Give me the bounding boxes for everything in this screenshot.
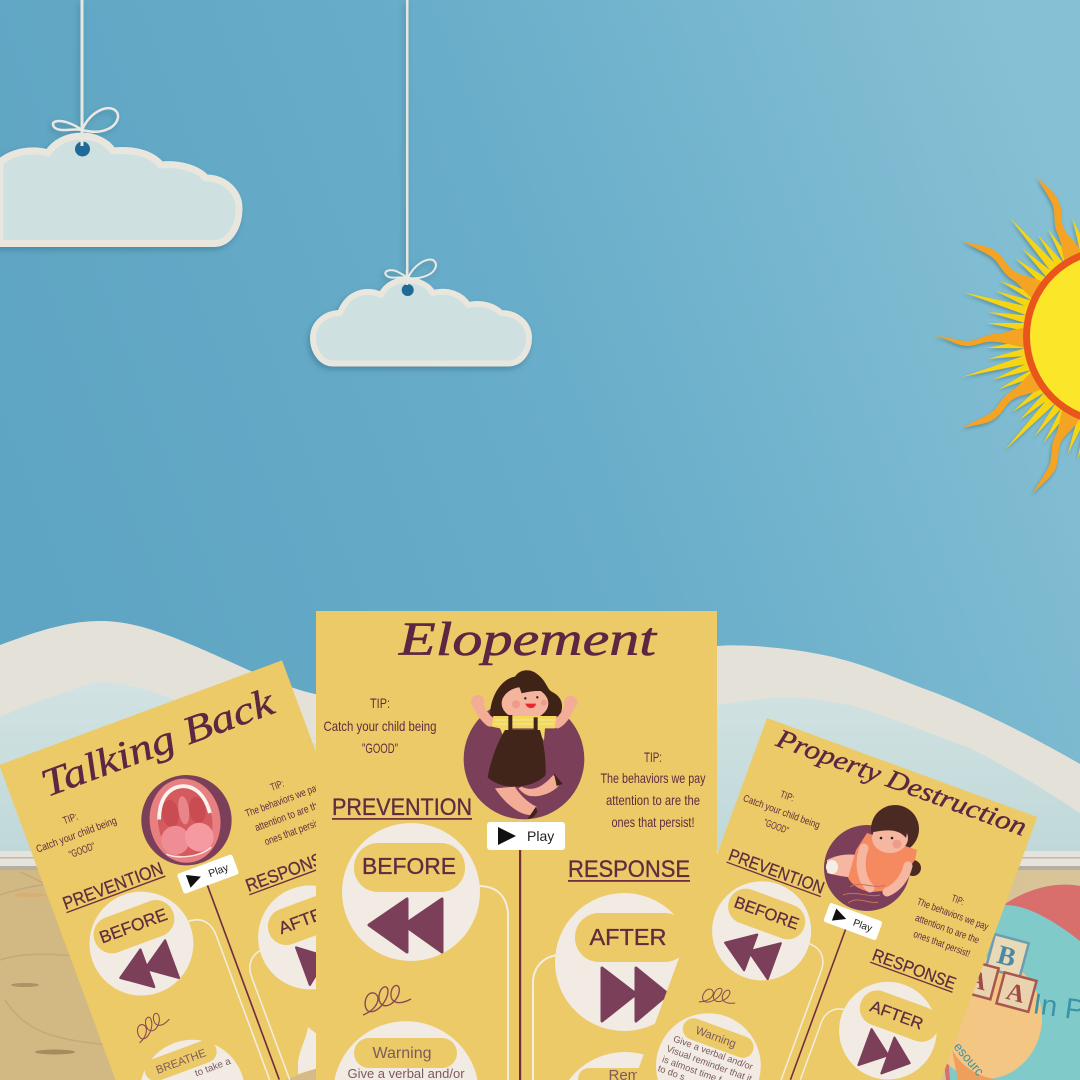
tip left: TIP:: [778, 789, 796, 804]
tip left: "GOOD": [762, 818, 790, 837]
tip right: attention to are the: [253, 798, 324, 834]
hanging cloud left: [0, 0, 239, 244]
tip left: [736, 778, 827, 846]
heading: prevention: PREVENTION: [60, 858, 166, 914]
icon: girl drawing on floor in circle: [824, 805, 921, 911]
play button: Play: [207, 862, 231, 880]
tip right: The behaviors we pay: [600, 770, 706, 786]
after circle: AFTER: [276, 899, 337, 938]
tip left: "GOOD": [67, 840, 97, 861]
breathe label: to take a: [194, 1056, 233, 1079]
tip right: ones that persist!: [612, 814, 694, 830]
icon: mouth in circle: [127, 759, 246, 882]
tip left: [324, 695, 436, 756]
warning label: Give a verbal and/or: [672, 1034, 754, 1072]
after circle: [555, 893, 693, 1031]
reminder circle sliver: [298, 1027, 318, 1074]
before circle: [698, 867, 825, 994]
title: property destruction: Property Destruction: [771, 722, 1031, 842]
breathe label: [141, 1034, 233, 1080]
play button: [177, 854, 239, 894]
reminder circle: [569, 1052, 681, 1080]
logo block B: [986, 934, 1029, 977]
hanging cloud right: [313, 0, 529, 364]
paper hills: [0, 621, 1080, 855]
logo: watercolor circle with blocks: [928, 885, 1080, 1080]
title: talking back: Talking Back: [35, 680, 280, 806]
sun: [935, 173, 1080, 499]
poster: talking back: [0, 660, 419, 1080]
tip right: TIP:: [269, 778, 286, 794]
squiggle: [132, 1010, 174, 1043]
heading: response: RESPONSE: [243, 845, 336, 896]
tip right: [600, 749, 706, 830]
tip right: attention to are the: [914, 913, 981, 947]
tip left: TIP:: [61, 811, 80, 827]
before circle: BEFORE: [362, 853, 456, 879]
tip left: Catch your child being: [34, 815, 119, 856]
after circle: AFTER: [590, 924, 666, 950]
tip right: The behaviors we pay: [915, 897, 990, 933]
tip right: The behaviors we pay: [244, 781, 322, 820]
logo block B: B: [994, 939, 1019, 973]
tip right: [904, 883, 995, 963]
sun disc: [1023, 246, 1080, 426]
warning label: [657, 1012, 765, 1080]
before circle: BEFORE: [732, 893, 801, 934]
tip left: "GOOD": [362, 740, 398, 756]
warning circle: Warning: [373, 1045, 431, 1062]
tip right: TIP:: [950, 893, 966, 908]
logo block A right: [996, 972, 1037, 1012]
title: elopement: Elopement: [398, 613, 658, 666]
sun straight rays: [961, 215, 1080, 461]
tip right: ones that persist!: [912, 929, 972, 960]
tip right: ones that persist!: [263, 815, 326, 848]
play button: Play: [851, 918, 873, 935]
play button: Play: [527, 828, 554, 844]
heading: prevention: PREVENTION: [332, 794, 472, 821]
baseboard: [0, 851, 1080, 870]
breathe label: BREATHE: [155, 1047, 208, 1077]
heading: prevention: PREVENTION: [726, 844, 827, 898]
sun wavy rays: [935, 173, 1080, 499]
heading: response: RESPONSE: [568, 856, 690, 883]
play button: [823, 902, 883, 941]
tip right: [238, 766, 334, 851]
icon: jumping girl in circle: [464, 670, 584, 819]
before circle: [342, 823, 480, 961]
play button: [487, 822, 565, 850]
squiggle: [699, 982, 739, 1014]
warning label: Warning: [694, 1025, 738, 1051]
before circle: [75, 877, 208, 1010]
tip left: TIP:: [370, 695, 390, 711]
after circle: [243, 871, 377, 1004]
poster: elopement: [316, 611, 717, 1080]
poster: property destruction: [634, 718, 1037, 1080]
logo block A left: A: [965, 966, 990, 996]
squiggle: [363, 985, 411, 1015]
before circle: BEFORE: [97, 904, 170, 947]
logo block A right: A: [1003, 978, 1028, 1009]
wooden floor: [0, 870, 1080, 1080]
logo block A left: [958, 960, 999, 999]
tip left: [28, 799, 124, 871]
logo text resources: esourc: [951, 1039, 988, 1079]
tip right: attention to are the: [606, 792, 700, 808]
warning circle: [334, 1021, 478, 1080]
tip right: TIP:: [644, 749, 662, 765]
after circle: AFTER: [867, 998, 926, 1033]
tip left: Catch your child being: [324, 718, 436, 734]
heading: response: RESPONSE: [870, 945, 959, 993]
tip left: Catch your child being: [741, 793, 821, 831]
after circle: [825, 968, 951, 1080]
